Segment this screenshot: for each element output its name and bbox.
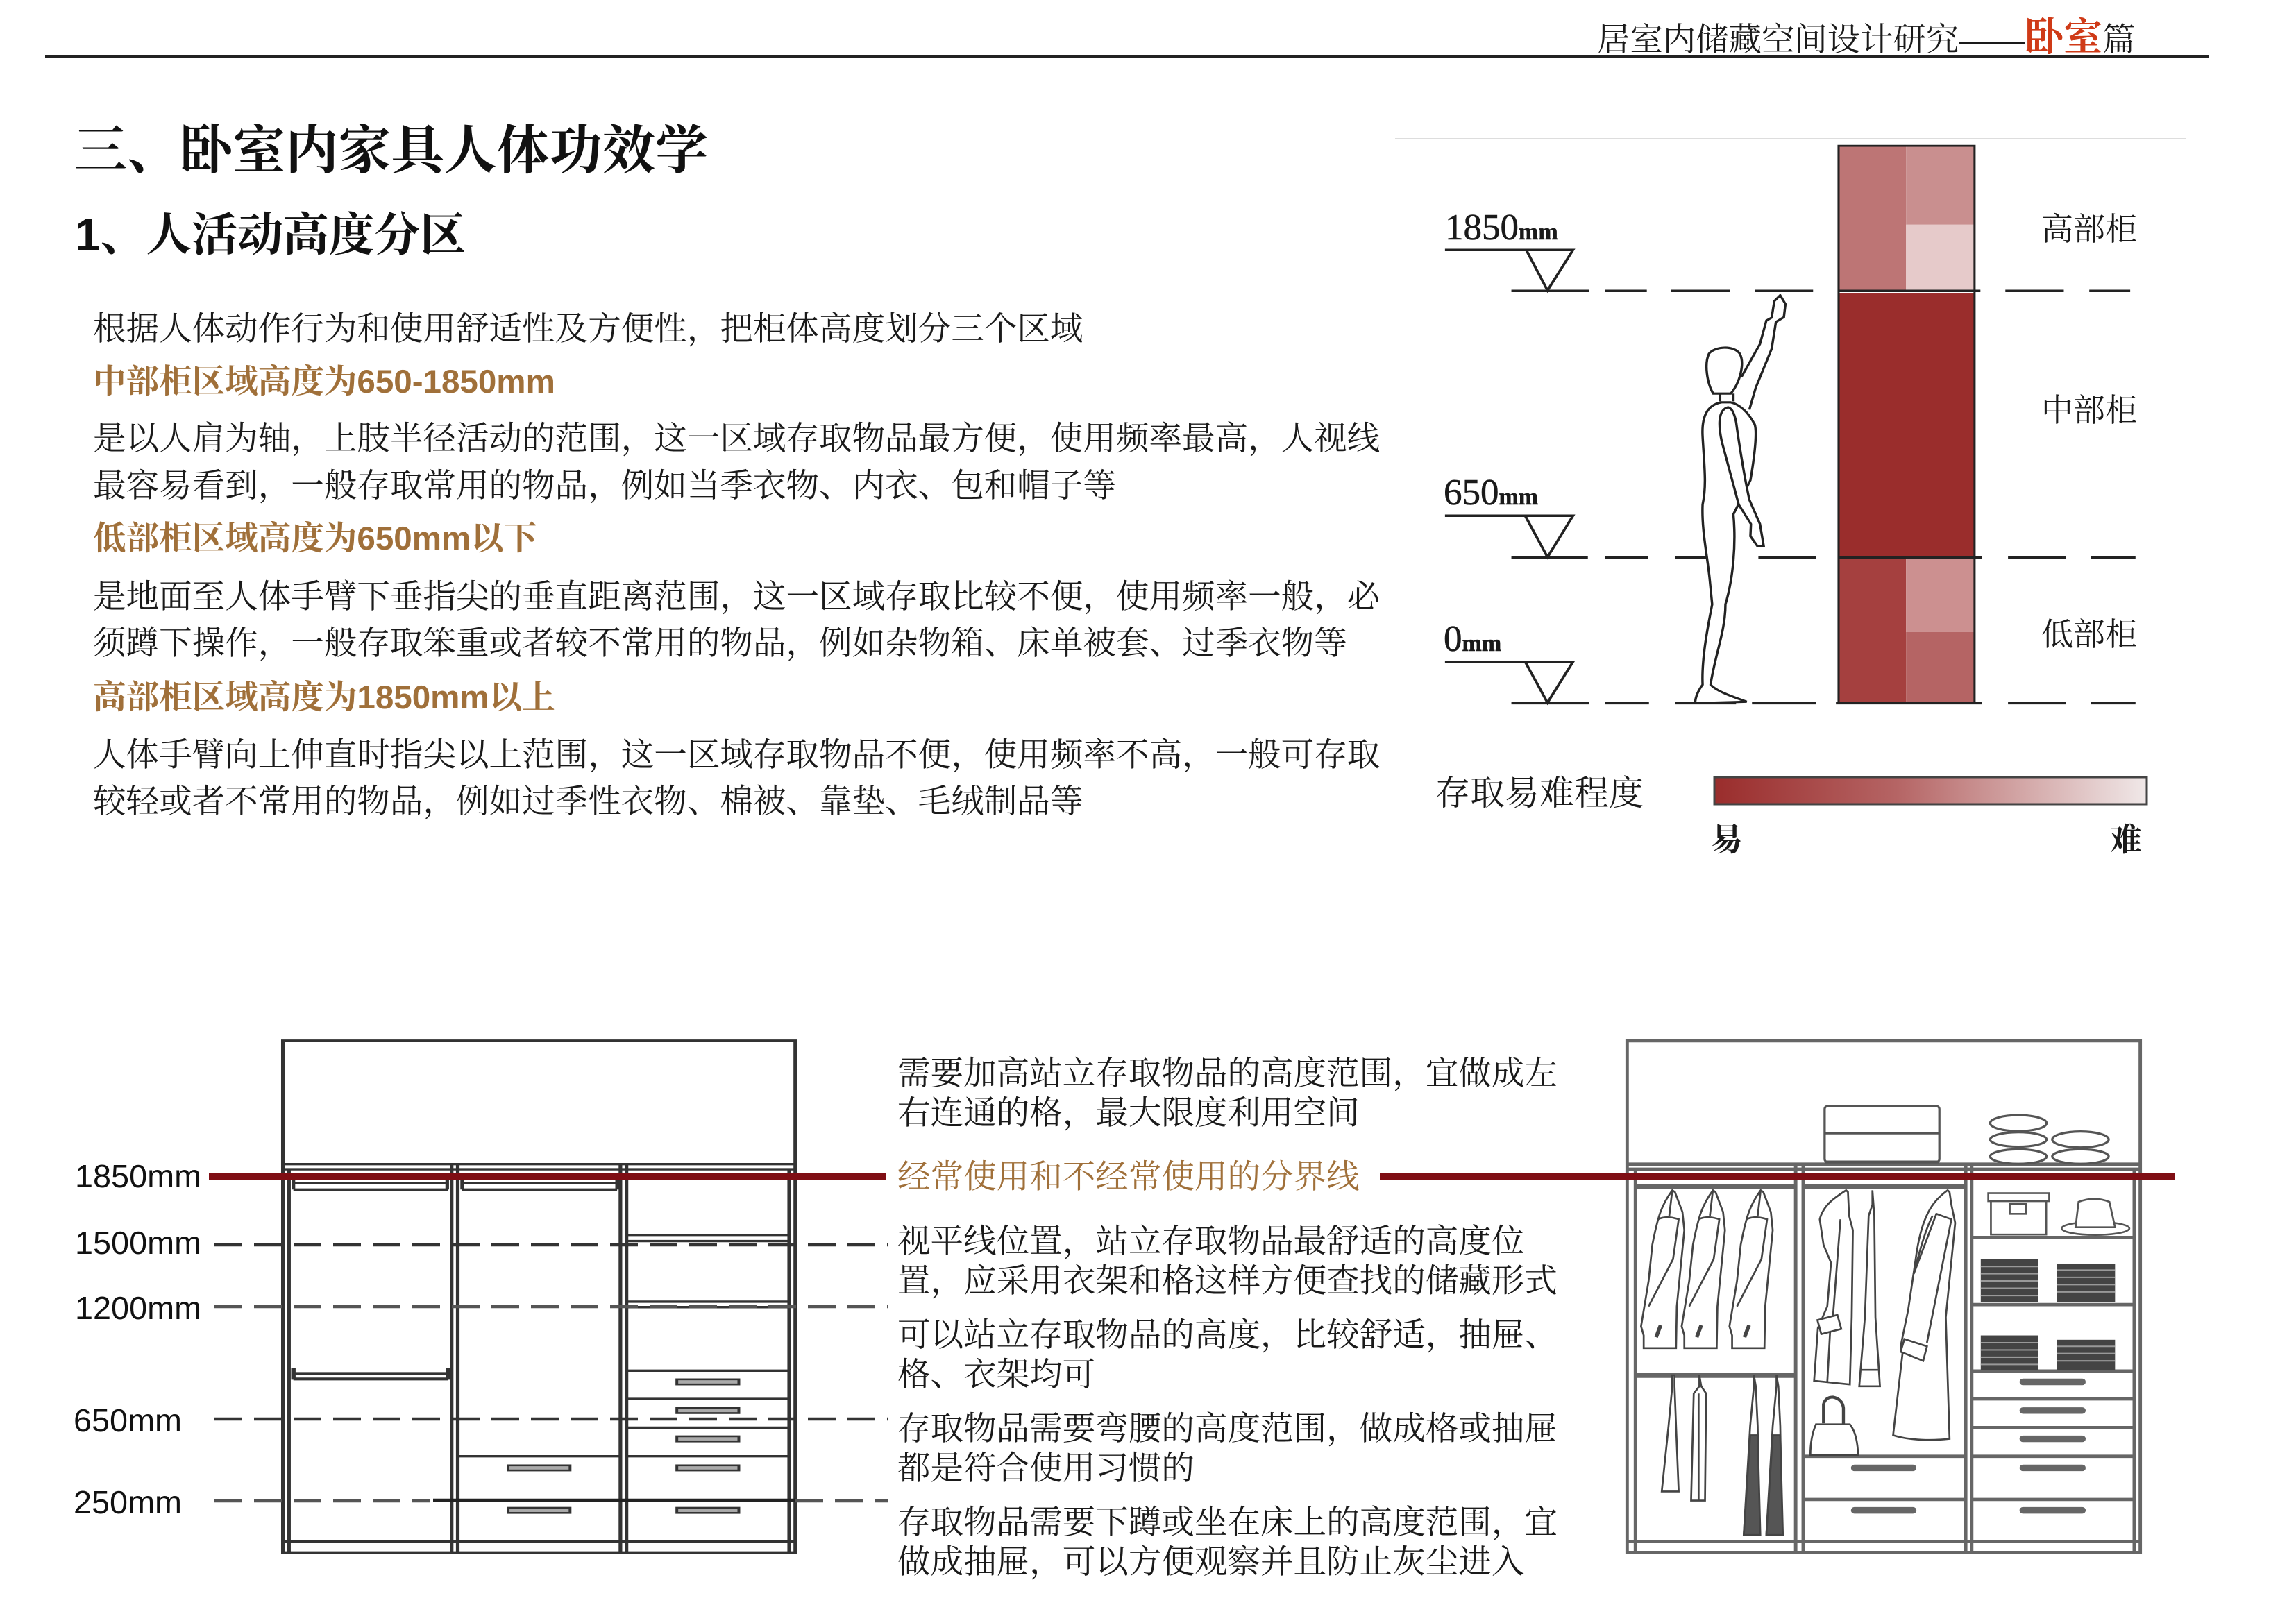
label: middle cabinet: 中部柜 — [2041, 393, 2137, 428]
note: 1200 — [897, 1318, 1558, 1393]
low zone heading: 低部柜区域高度为650mm以下 — [93, 520, 537, 557]
middle zone description: 最容易看到，一般存取常用的物品，例如当季衣物、内衣、包和帽子等 — [93, 468, 1116, 504]
divider label: 经常使用和不经常使用的分界线 — [897, 1159, 1360, 1196]
handbag — [1810, 1397, 1858, 1455]
label: high cabinet: 高部柜 — [2041, 212, 2137, 247]
legend title: 存取易难程度 — [1435, 774, 1644, 813]
note: 1500 — [897, 1224, 1558, 1300]
red divider line right — [1380, 1173, 2175, 1180]
middle zone description — [93, 421, 1380, 504]
note: 650: 存取物品需要弯腰的高度范围，做成格或抽屉 — [897, 1411, 1558, 1447]
note: above 1850: 需要加高站立存取物品的高度范围，宜做成左 — [897, 1056, 1558, 1092]
label: 650mm: 650mm — [1444, 473, 1538, 513]
middle zone description: 是以人肩为轴，上肢半径活动的范围，这一区域存取物品最方便，使用频率最高，人视线 — [93, 421, 1380, 457]
note: above 1850: 右连通的格，最大限度利用空间 — [897, 1096, 1360, 1132]
header rule — [45, 55, 2209, 58]
note: 250: 存取物品需要下蹲或坐在床上的高度范围，宜 — [897, 1505, 1558, 1541]
low zone description: 须蹲下操作，一般存取笨重或者较不常用的物品，例如杂物箱、床单被套、过季衣物等 — [93, 626, 1347, 662]
250mm: 250mm — [74, 1484, 182, 1520]
middle zone heading: 中部柜区域高度为650-1850mm — [93, 364, 555, 400]
title: 三、卧室内家具人体功效学 — [74, 121, 708, 180]
folded stacks — [1981, 1259, 2115, 1370]
page header — [45, 17, 2209, 60]
legend: easy: 易 — [1711, 822, 1743, 858]
trench coat, belt, long coat — [1814, 1190, 1955, 1440]
high zone description: 人体手臂向上伸直时指尖以上范围，这一区域存取物品不便，使用频率不高，一般可存取 — [93, 738, 1380, 774]
label: 0mm: 0mm — [1444, 619, 1501, 659]
note: 1200: 可以站立存取物品的高度，比较舒适，抽屉、 — [897, 1318, 1558, 1354]
high zone description — [93, 738, 1380, 820]
note: 250 — [897, 1505, 1558, 1581]
human figure — [1695, 296, 1785, 703]
label: 1850mm: 1850mm — [1445, 207, 1558, 248]
items on top: boxes and plates — [1825, 1106, 2109, 1164]
note: above 1850 — [897, 1056, 1558, 1132]
note: 1500: 视平线位置，站立存取物品最舒适的高度位 — [897, 1224, 1524, 1260]
red divider line left — [209, 1173, 886, 1180]
note: 1200: 格、衣架均可 — [897, 1357, 1095, 1393]
section heading: 1、人活动高度分区 — [75, 209, 466, 260]
1200mm: 1200mm — [75, 1290, 201, 1326]
level markers and dashed lines — [1445, 250, 2136, 703]
body text: height zones — [93, 312, 1380, 820]
legend gradient bar — [1714, 777, 2147, 804]
annotation column — [897, 1056, 1558, 1581]
storage box and hat — [1989, 1193, 2129, 1235]
panel: height zone diagram — [1395, 138, 2186, 858]
header title: 居室内储藏空间设计研究——卧室篇 — [1597, 17, 2135, 60]
low zone description: 是地面至人体手臂下垂指尖的垂直距离范围，这一区域存取比较不便，使用频率一般，必 — [93, 579, 1380, 615]
drawer handles — [1855, 1382, 2082, 1511]
intro: 根据人体动作行为和使用舒适性及方便性，把柜体高度划分三个区域 — [93, 312, 1083, 348]
note: 650: 都是符合使用习惯的 — [897, 1451, 1195, 1487]
cabinet outline — [283, 1041, 795, 1552]
cabinet height column — [1836, 146, 1982, 703]
dimension labels — [74, 1158, 201, 1520]
high zone heading: 高部柜区域高度为1850mm以上 — [93, 679, 555, 716]
legend: hard: 难 — [2110, 822, 2142, 858]
1500mm: 1500mm — [75, 1225, 201, 1261]
dashed height lines — [214, 1245, 888, 1501]
650mm: 650mm — [74, 1402, 182, 1438]
note: 650 — [897, 1411, 1558, 1487]
solid line 250mm — [433, 1499, 795, 1502]
panel: left cabinet elevation — [209, 1039, 888, 1554]
panel: right cabinet with stored items — [1626, 1039, 2142, 1554]
faint top rule — [1395, 138, 2186, 139]
1850mm: 1850mm — [75, 1158, 201, 1194]
label: low cabinet: 低部柜 — [2041, 617, 2137, 652]
note: 1500: 置，应采用衣架和格这样方便查找的储藏形式 — [897, 1264, 1558, 1300]
high zone description: 较轻或者不常用的物品，例如过季性衣物、棉被、靠垫、毛绒制品等 — [93, 784, 1083, 820]
hanging jackets — [1641, 1190, 1773, 1348]
low zone description — [93, 579, 1380, 662]
cabinet frame — [1627, 1041, 2141, 1552]
hanging trousers and ties — [1662, 1375, 1783, 1535]
note: 250: 做成抽屉，可以方便观察并且防止灰尘进入 — [897, 1545, 1524, 1581]
